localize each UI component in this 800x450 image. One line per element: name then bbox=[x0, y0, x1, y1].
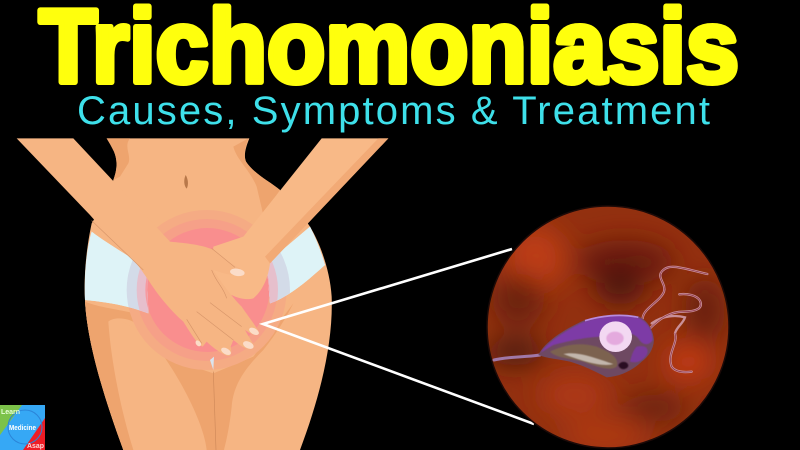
underwear right bbox=[267, 227, 325, 303]
underwear left bbox=[85, 232, 148, 313]
inflammation rings on skin bbox=[127, 210, 287, 370]
pointer lines bbox=[263, 249, 534, 424]
right arm and hand bbox=[212, 138, 388, 299]
crease at groin bbox=[210, 357, 214, 370]
body brown texture bbox=[550, 344, 617, 369]
flagella bbox=[494, 267, 707, 372]
parasite body bbox=[538, 314, 654, 377]
left leg bbox=[85, 300, 217, 450]
body highlight bbox=[585, 315, 638, 321]
channel logo: Asap bbox=[27, 443, 44, 450]
microscope view circle bbox=[485, 206, 729, 450]
microscope circle border bbox=[487, 206, 729, 448]
finger lines bbox=[92, 221, 242, 343]
body purple upper edge bbox=[541, 316, 653, 353]
navel bbox=[184, 175, 188, 189]
left arm and hand bbox=[17, 138, 259, 356]
microscope background bbox=[487, 206, 729, 448]
subtitle: Causes, Symptoms & Treatment bbox=[77, 89, 710, 133]
arm shading bbox=[265, 138, 388, 263]
channel logo: Medicine bbox=[9, 425, 36, 432]
illustration: body with hands bbox=[17, 138, 388, 450]
inflammation rings on underwear bbox=[84, 226, 325, 314]
body shading bbox=[85, 138, 293, 450]
finger nails bbox=[194, 268, 260, 357]
torso and legs bbox=[85, 138, 332, 450]
nucleus bbox=[599, 321, 632, 352]
channel logo bbox=[0, 405, 45, 450]
parasite bbox=[494, 267, 707, 377]
channel logo: Learn bbox=[1, 409, 20, 416]
